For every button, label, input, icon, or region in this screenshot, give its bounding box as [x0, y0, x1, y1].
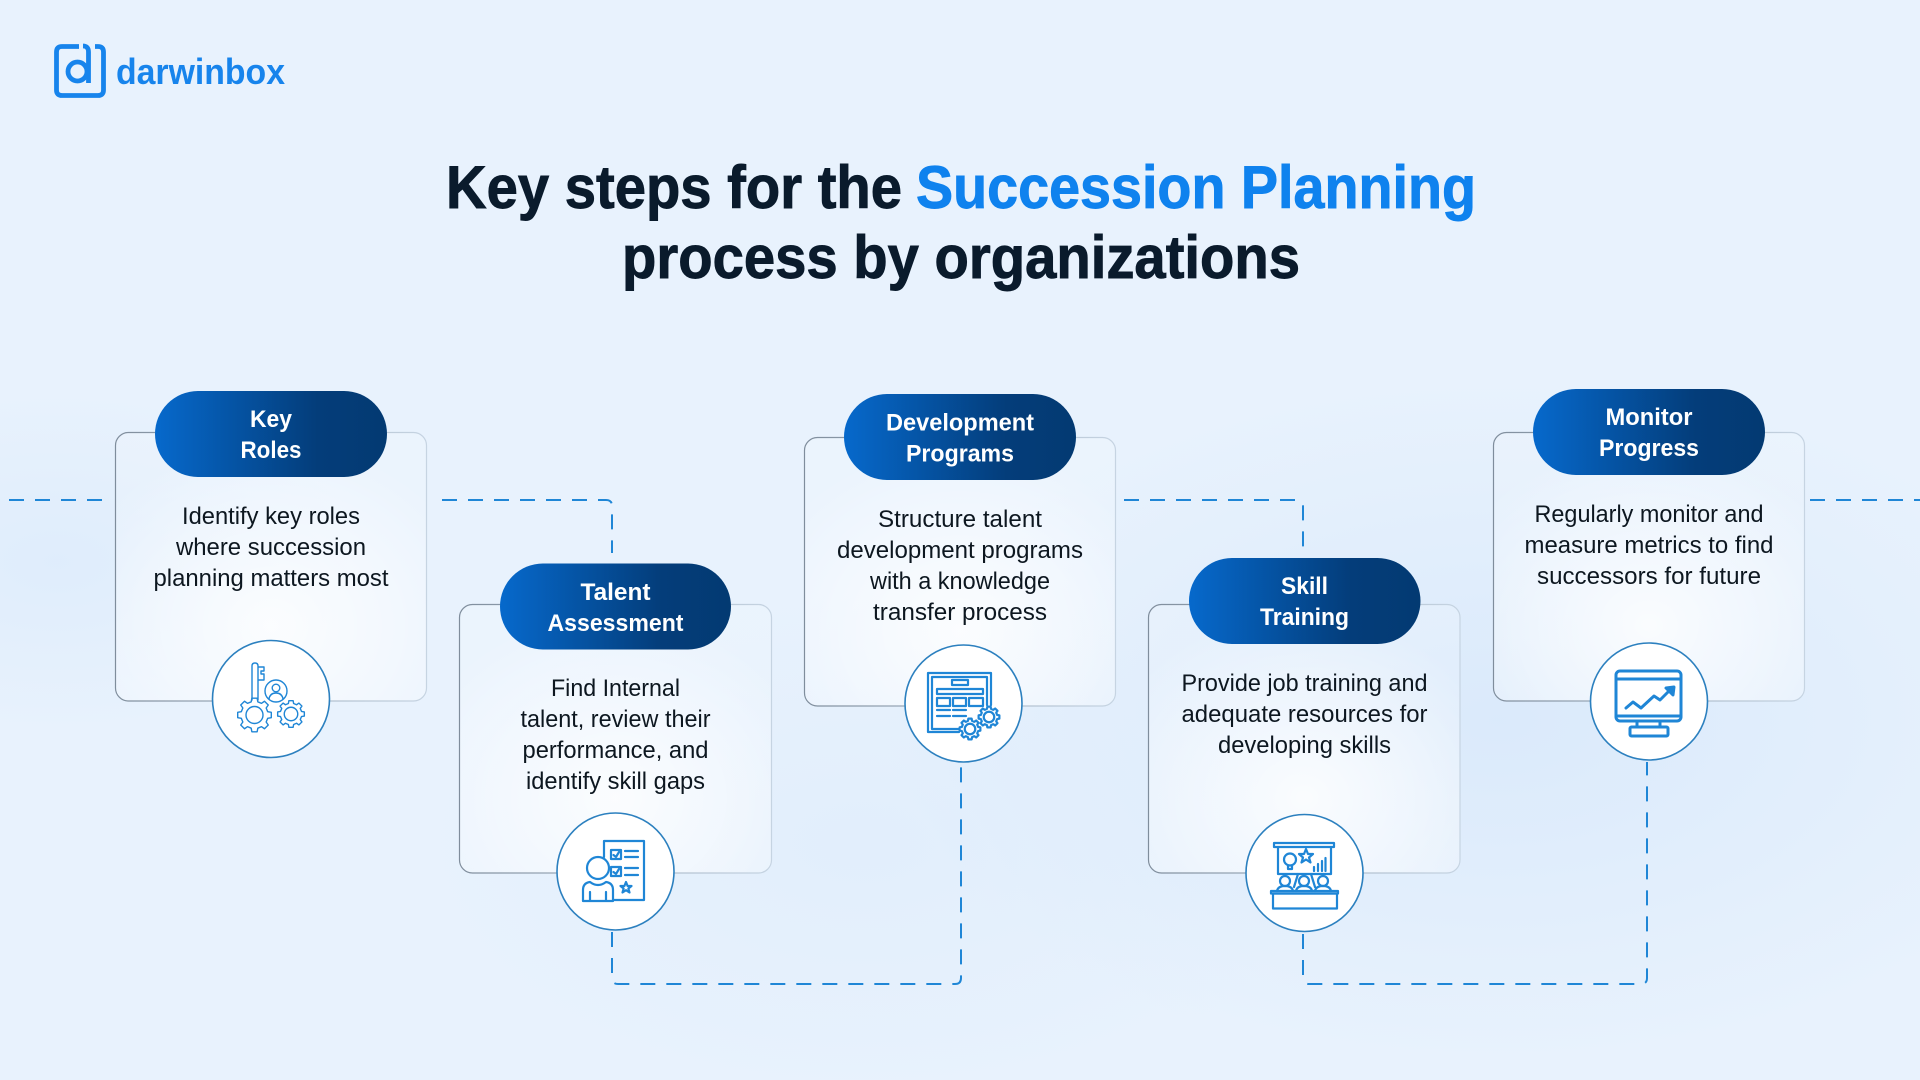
- card: [116, 432, 426, 701]
- pill heading: [844, 394, 1076, 480]
- body text: where succession: [175, 534, 366, 561]
- pill heading: Roles: [240, 437, 302, 464]
- pill heading: Skill: [1281, 573, 1328, 600]
- panel: development programs: [804, 394, 1116, 762]
- panel: skill training: [1148, 558, 1460, 932]
- body text: performance, and: [522, 737, 708, 764]
- body text: Structure talent: [878, 506, 1042, 533]
- pill heading: Development: [886, 410, 1034, 436]
- card: [804, 438, 1116, 706]
- title: Key steps for the: [446, 154, 902, 221]
- body text: [1524, 501, 1774, 590]
- body text: [1182, 670, 1428, 759]
- body text: successors for future: [1537, 563, 1761, 590]
- pill heading: Monitor: [1606, 404, 1692, 431]
- body text: Regularly monitor and: [1534, 501, 1764, 528]
- pill heading: [155, 391, 387, 477]
- body text: transfer process: [873, 599, 1047, 626]
- body text: [520, 675, 710, 795]
- pill heading: [1533, 389, 1765, 475]
- body text: Provide job training and: [1182, 670, 1428, 697]
- body text: development programs: [837, 537, 1083, 564]
- logo: darwinbox: [56, 46, 285, 96]
- body text: [154, 503, 389, 592]
- pill heading: Assessment: [548, 610, 684, 637]
- body text: with a knowledge: [869, 568, 1050, 595]
- pill heading: Training: [1260, 604, 1349, 631]
- title: [446, 154, 1476, 291]
- icon: person with checklist: [557, 813, 674, 930]
- pill heading: [500, 564, 731, 650]
- body text: talent, review their: [520, 706, 710, 733]
- icon: key with gears: [212, 640, 330, 758]
- panel: key roles: [116, 391, 426, 758]
- pill heading: Programs: [906, 440, 1014, 468]
- pill heading: [1189, 558, 1420, 644]
- card: [1148, 604, 1460, 873]
- title: Succession Planning: [916, 154, 1476, 221]
- icon: classroom presentation: [1246, 814, 1363, 932]
- body text: [837, 506, 1083, 626]
- body text: developing skills: [1218, 732, 1391, 759]
- body text: planning matters most: [154, 565, 389, 592]
- title: process by organizations: [622, 224, 1300, 291]
- icon: logo mark: [56, 46, 104, 96]
- pill heading: Talent: [580, 579, 650, 606]
- body text: measure metrics to find: [1524, 532, 1774, 559]
- pill heading: Progress: [1599, 435, 1699, 462]
- pill heading: Key: [250, 406, 293, 433]
- body text: adequate resources for: [1182, 701, 1428, 728]
- body text: Identify key roles: [182, 503, 360, 530]
- card: [1494, 432, 1804, 701]
- icon: program layout with gears: [905, 645, 1022, 762]
- panel: monitor progress: [1494, 389, 1804, 760]
- dashed connector path: [0, 500, 1920, 984]
- panel: talent assessment: [460, 564, 772, 930]
- card: [460, 604, 772, 873]
- logo wordmark: darwinbox: [116, 51, 285, 92]
- body text: identify skill gaps: [526, 768, 705, 795]
- body text: Find Internal: [551, 675, 680, 702]
- icon: monitor with rising chart: [1590, 643, 1708, 760]
